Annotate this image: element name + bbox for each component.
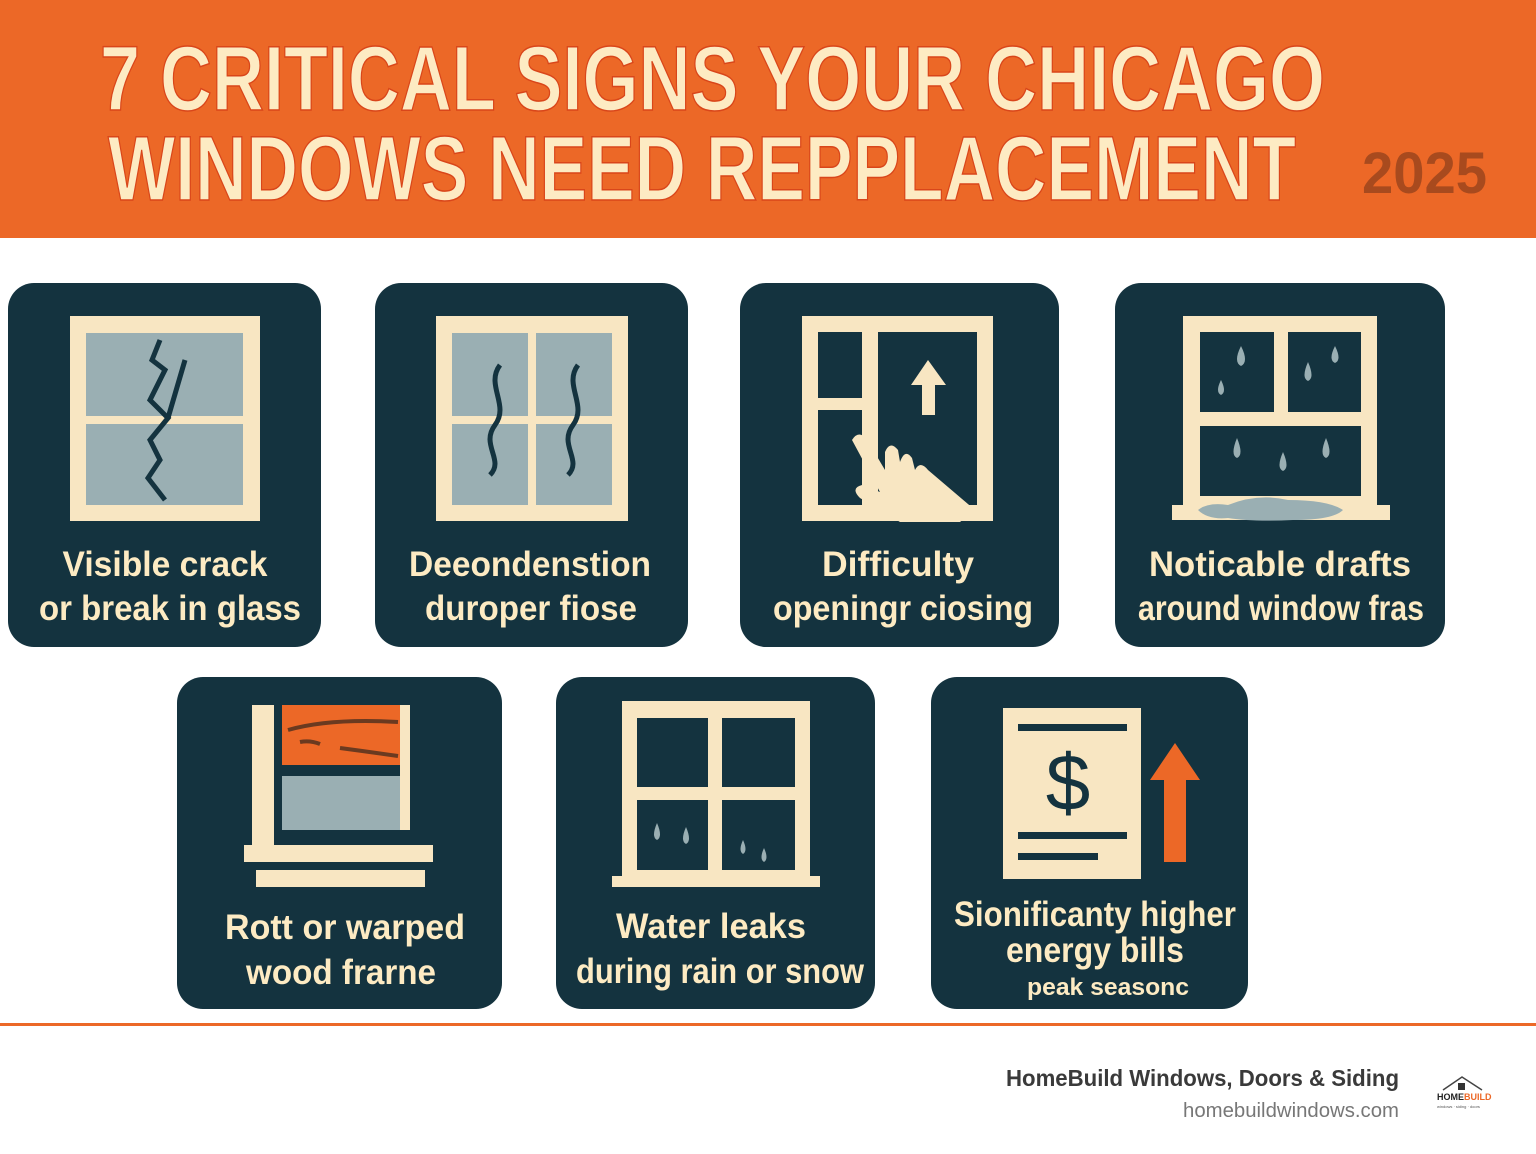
- card 2: condensation: duroper fiose: [425, 589, 637, 628]
- card 4: drafts: around window fras: [1138, 589, 1424, 628]
- card 7: energy bills: energy bills: [1006, 931, 1184, 970]
- card 3: difficulty opening: openingr ciosing: [773, 589, 1033, 628]
- card 6: water leaks: Water leaks: [616, 907, 806, 946]
- card 5: rot: wood frarne: [245, 953, 436, 992]
- card 7: energy bills: peak seasonc: [1027, 974, 1189, 1001]
- card 3: difficulty opening: [740, 283, 1059, 647]
- logo: HOMEBUILD: [1437, 1092, 1492, 1102]
- card 7: energy bills: Sionificanty higher: [954, 895, 1236, 934]
- card 1: visible crack: or break in glass: [39, 589, 301, 628]
- card 6: water leaks: [556, 677, 875, 1009]
- card 6: water leaks: during rain or snow: [576, 952, 865, 991]
- footer: homebuildwindows.com: [1183, 1100, 1399, 1122]
- logo: windows · siding · doors: [1437, 1104, 1480, 1109]
- header banner: [0, 0, 1536, 238]
- footer: [1006, 1065, 1399, 1122]
- card 4: drafts: [1115, 283, 1445, 647]
- card 2: condensation: [375, 283, 688, 647]
- year: 2025: [1362, 141, 1487, 206]
- card 7: energy bills: [931, 677, 1248, 1009]
- footer: HomeBuild Windows, Doors & Siding: [1006, 1065, 1399, 1091]
- card 1: visible crack: Visible crack: [62, 545, 268, 584]
- title: [100, 28, 1325, 220]
- divider: [0, 1023, 1536, 1026]
- card 4: drafts: Noticable drafts: [1149, 545, 1411, 584]
- card 5: rot: [177, 677, 502, 1009]
- card 7: energy bills: $: [1046, 738, 1090, 827]
- card 3: difficulty opening: Difficulty: [822, 545, 975, 584]
- logo: [1437, 1077, 1492, 1109]
- card 1: visible crack: [8, 283, 321, 647]
- card 2: condensation: Deeondenstion: [409, 545, 651, 584]
- card 5: rot: Rott or warped: [225, 908, 465, 947]
